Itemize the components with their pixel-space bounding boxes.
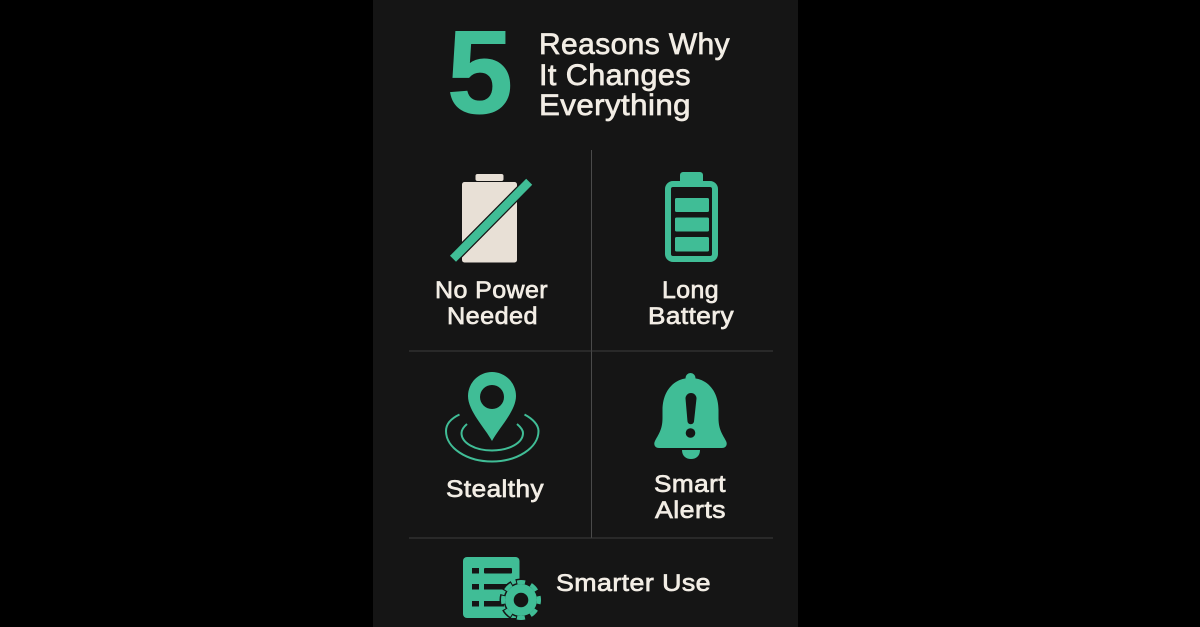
label: Smarter Use: Smarter Use: [556, 570, 711, 597]
label: No Power Needed: No Power: [435, 277, 548, 304]
icon: full battery: [668, 172, 715, 259]
label: Smart Alerts: Smart: [654, 471, 726, 498]
panel: dark central card: [373, 0, 798, 627]
label: No Power Needed: [435, 277, 548, 330]
title: [539, 28, 730, 122]
icon: location pin with rings: [446, 372, 538, 462]
label: Stealthy: Stealthy: [446, 476, 544, 503]
label: Long Battery: Long: [662, 277, 719, 304]
icon: alert bell: [654, 373, 727, 459]
title: Reasons Why: [539, 28, 730, 61]
label: No Power Needed: Needed: [447, 303, 538, 330]
title: It Changes: [539, 59, 691, 92]
label: Long Battery: Battery: [648, 303, 734, 330]
heading numeral: 5: 5: [447, 7, 513, 139]
icon: crossed-out battery: [453, 174, 529, 262]
label: Smart Alerts: Alerts: [655, 497, 726, 524]
icon: list with gear: [463, 557, 539, 618]
title: Everything: [539, 89, 691, 122]
label: Long Battery: [648, 277, 734, 330]
label: Smart Alerts: [654, 471, 726, 524]
